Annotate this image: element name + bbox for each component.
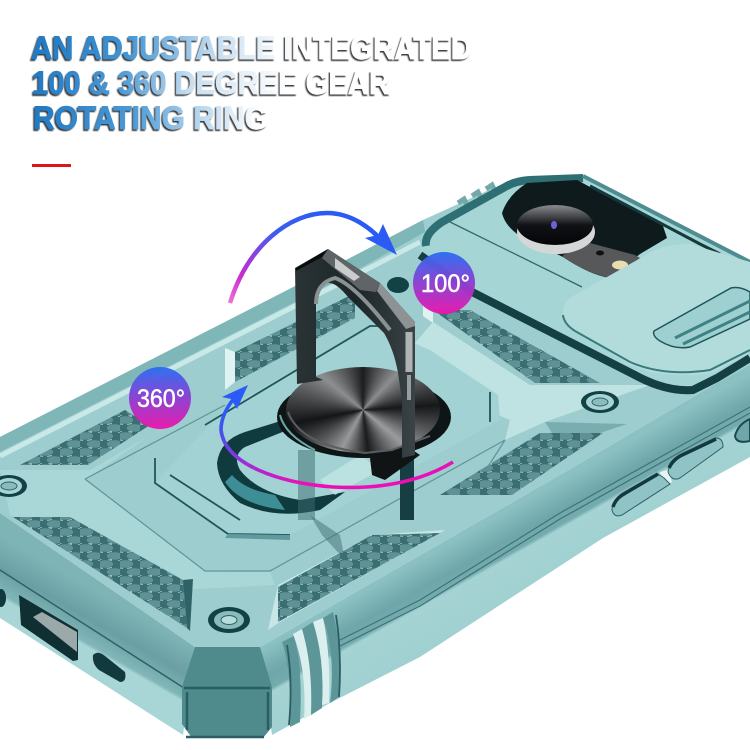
outer base ellipse bbox=[277, 376, 451, 458]
ring drop shadow three bbox=[310, 515, 345, 560]
grip: middle right bbox=[440, 433, 603, 495]
title line 1: AN ADJUSTABLE INTEGRATED bbox=[31, 30, 472, 66]
plate outline bbox=[85, 405, 505, 571]
ring top notch bbox=[335, 258, 360, 281]
screw: left bbox=[0, 475, 27, 497]
light cross panel bbox=[390, 322, 650, 440]
arrowhead bbox=[365, 224, 397, 255]
middle grip top wedge bbox=[545, 422, 627, 433]
camera body bbox=[563, 243, 640, 278]
arrow: 100 degree rotation bbox=[230, 213, 397, 303]
grip: upper centre bbox=[235, 297, 355, 382]
ring right leg shine bbox=[406, 332, 412, 372]
volume button two bbox=[668, 438, 723, 479]
pale diagonal reflection bbox=[320, 455, 380, 495]
side grip ridges bbox=[458, 185, 496, 207]
grip: lower centre bbox=[278, 533, 440, 622]
lens bezel bbox=[517, 210, 595, 254]
slider cover bbox=[563, 244, 750, 375]
track line bbox=[450, 222, 582, 287]
grip hinge bevel bbox=[423, 300, 433, 323]
badge text: 360° bbox=[137, 385, 185, 413]
arc bbox=[230, 213, 388, 303]
volume button one bbox=[612, 474, 670, 516]
title line 3: ROTATING RING bbox=[33, 100, 268, 136]
teal ring inset bbox=[225, 475, 285, 510]
button gap highlight bbox=[660, 470, 672, 486]
lower-left side seam bbox=[0, 570, 184, 688]
port slot bbox=[93, 653, 125, 682]
camera slider housing bbox=[420, 175, 750, 390]
inner plate bevels bbox=[155, 326, 490, 535]
phone case bbox=[0, 175, 750, 738]
screw: top bbox=[387, 277, 409, 293]
ring corner facet bbox=[377, 283, 415, 329]
port interior bbox=[33, 612, 77, 652]
arrow: 360 degree rotation bbox=[221, 385, 453, 487]
title bbox=[31, 30, 472, 136]
flash bbox=[612, 260, 628, 270]
red accent rule bbox=[32, 164, 71, 167]
grip: lower left bbox=[13, 517, 187, 628]
badge: 360 degrees bbox=[129, 367, 191, 429]
housing bbox=[420, 175, 750, 387]
badge text: 100° bbox=[421, 270, 470, 298]
slider cover edge bbox=[563, 315, 750, 372]
camera window bbox=[502, 180, 667, 278]
lower-right side seam bbox=[340, 407, 750, 646]
hinge block bbox=[370, 445, 420, 480]
ring drop shadow one bbox=[298, 450, 315, 520]
grip: left bbox=[20, 410, 150, 465]
speaker hole bbox=[0, 589, 6, 607]
honeycomb grip panels bbox=[13, 297, 603, 628]
housing dark stripe bbox=[590, 186, 720, 254]
microphone bbox=[596, 250, 604, 256]
housing lower edge bbox=[420, 255, 750, 390]
top edge highlight bbox=[0, 242, 420, 456]
lens glass bbox=[517, 205, 593, 245]
left light panel bbox=[0, 435, 275, 590]
plate highlight bbox=[225, 534, 290, 540]
lower-right side wall bbox=[260, 365, 750, 735]
inner plate bbox=[155, 326, 500, 535]
housing glass band bbox=[426, 178, 583, 246]
badge: 100 degrees bbox=[413, 252, 475, 314]
arc bbox=[221, 394, 453, 487]
metal disc bbox=[286, 367, 440, 453]
ring drop shadow two bbox=[400, 455, 414, 520]
arrowhead bbox=[222, 385, 248, 409]
slider grip groove bbox=[675, 301, 750, 344]
lens reflection bbox=[551, 221, 557, 229]
lower-left side wall bbox=[0, 513, 195, 735]
screw: bottom bbox=[208, 607, 250, 633]
ring left facet bbox=[296, 249, 328, 271]
ring hinge bevel bbox=[225, 348, 235, 390]
power button bbox=[735, 419, 750, 442]
slider grip bbox=[654, 288, 750, 348]
ring mount bbox=[277, 376, 451, 480]
corner bumper seam bbox=[184, 688, 270, 737]
ring base shadows bbox=[217, 415, 414, 560]
screw: right bbox=[581, 391, 619, 413]
title line 2: 100 & 360 DEGREE GEAR bbox=[32, 65, 390, 101]
rotating base ring bbox=[217, 415, 345, 514]
case top face bbox=[0, 178, 750, 647]
ring frame bbox=[295, 249, 415, 458]
folding ring bbox=[295, 249, 415, 458]
ring inner shine bbox=[316, 278, 390, 330]
disc lower rim bbox=[288, 412, 430, 453]
USB port bbox=[19, 595, 78, 661]
corner bumper bbox=[182, 647, 272, 738]
ring top band bbox=[322, 249, 380, 292]
housing outer rim bbox=[583, 176, 750, 262]
bumper ribs bbox=[282, 612, 340, 727]
lower-left grip end shadow bbox=[183, 579, 193, 631]
bottom light panel bbox=[268, 530, 445, 630]
base glint bbox=[280, 415, 315, 450]
top edge bevel bbox=[0, 220, 425, 452]
grip: upper right bbox=[433, 310, 600, 383]
ring right leg glint bbox=[407, 375, 411, 400]
